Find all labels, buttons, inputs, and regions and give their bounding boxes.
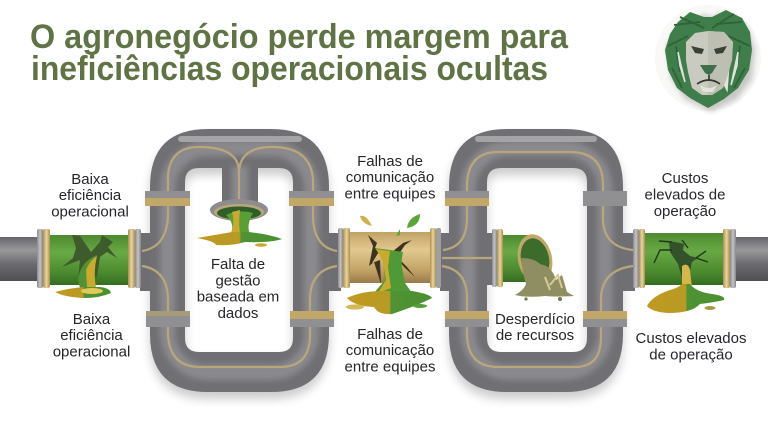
label: Falhas de comunicação entre equipes (top): Falhas de xyxy=(357,153,423,170)
label: Desperdício de recursos: de recursos xyxy=(496,327,574,344)
eyes xyxy=(691,46,727,54)
label: Falta de gestão baseada em dados: baseada em xyxy=(197,289,279,306)
title xyxy=(30,18,569,88)
leak xyxy=(682,265,692,288)
broken green pipe right xyxy=(633,229,736,313)
leaking flange center xyxy=(197,199,282,247)
pipe clamps xyxy=(145,191,627,327)
broken brass coupling xyxy=(338,214,441,314)
face xyxy=(686,31,733,95)
puddle xyxy=(647,284,724,313)
gold seam lines xyxy=(142,147,337,367)
logo: green lion head xyxy=(655,5,761,112)
center stem xyxy=(222,160,258,206)
leak xyxy=(78,255,97,288)
crack xyxy=(669,241,698,280)
label: Custos elevados de operação (top): operação xyxy=(654,203,716,220)
pipe loop 1 xyxy=(140,129,341,399)
spilled green pipe xyxy=(492,229,574,301)
cracks xyxy=(368,235,415,284)
label: Falhas de comunicação entre equipes (top): comunicação xyxy=(346,169,434,186)
right outlet pipe xyxy=(734,237,768,281)
label: Baixa eficiência operacional (top): operacional xyxy=(51,203,129,220)
splashes xyxy=(360,216,372,226)
label: Custos elevados de operação (bottom): Custos elevados xyxy=(636,330,746,347)
label: Falta de gestão baseada em dados: dados xyxy=(218,305,258,322)
nose xyxy=(700,65,717,75)
left inlet pipe xyxy=(0,237,40,281)
label: Custos elevados de operação (top): Custos xyxy=(662,170,708,187)
label: Baixa eficiência operacional (bottom): operacional xyxy=(53,343,130,360)
label: Custos elevados de operação (top): elevados de xyxy=(645,186,725,203)
label: Falhas de comunicação entre equipes (bottom): entre equipes xyxy=(345,358,435,375)
mane xyxy=(665,10,752,108)
title: O agronegócio perde margem para xyxy=(30,18,569,56)
label: Falta de gestão baseada em dados: Falta de xyxy=(211,256,265,273)
label: Baixa eficiência operacional (top): Baixa xyxy=(71,171,109,188)
label: Baixa eficiência operacional (bottom): Baixa xyxy=(73,311,111,328)
green and gold flow xyxy=(374,248,412,293)
label: Baixa eficiência operacional (bottom): eficiência xyxy=(60,327,123,344)
gold seam lines xyxy=(442,152,633,367)
label: Custos elevados de operação (bottom): de operação xyxy=(649,346,733,363)
sludge xyxy=(515,258,574,297)
label: Baixa eficiência operacional (top): eficiência xyxy=(59,187,122,204)
title: ineficiências operacionais ocultas xyxy=(31,50,548,88)
pipe loop 2 xyxy=(440,129,635,399)
label: Desperdício de recursos: Desperdício xyxy=(495,311,575,328)
label: Falhas de comunicação entre equipes (top): entre equipes xyxy=(345,185,435,202)
label: Falta de gestão baseada em dados: gestão xyxy=(215,272,261,289)
label: Falhas de comunicação entre equipes (bottom): comunicação xyxy=(346,342,434,359)
puddle xyxy=(347,291,432,314)
broken green pipe left xyxy=(37,229,141,298)
label: Falhas de comunicação entre equipes (bottom): Falhas de xyxy=(357,326,423,343)
crack xyxy=(62,235,117,280)
